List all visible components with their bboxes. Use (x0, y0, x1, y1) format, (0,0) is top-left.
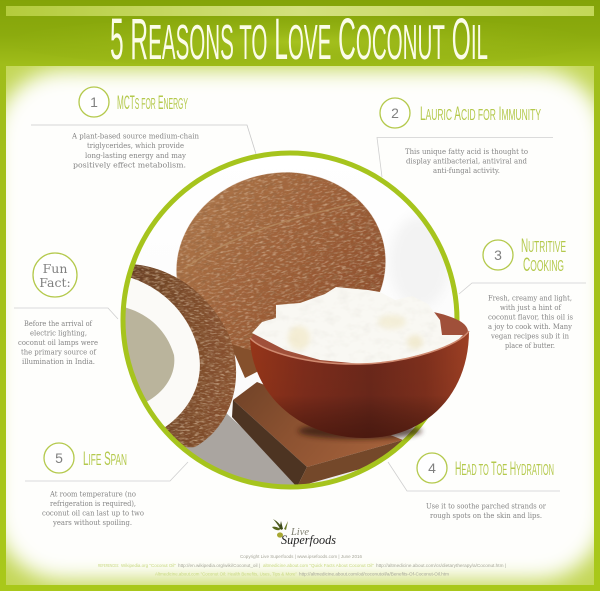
reason 5: Life Span (25, 443, 188, 527)
body text 2 (405, 147, 528, 175)
green ring (123, 153, 457, 487)
connector line 5 (25, 462, 188, 481)
reason 1: MCTs for Energy (31, 87, 256, 170)
reason 2: Lauric Acid for Immunity (377, 98, 553, 177)
title: 5 REASONS TO LOVE COCONUT OIL (110, 7, 488, 72)
fun fact (14, 253, 118, 366)
connector line 1 (31, 125, 256, 154)
reason 3: Nutritive Cooking (459, 236, 586, 350)
references: altmedicine.about.com "Quick Facts About Coconut Oil" (263, 563, 374, 568)
heading 3: COOKING (523, 255, 564, 276)
number badge 5 (44, 443, 74, 473)
yellow flake shading right (378, 315, 406, 329)
bowl shadow on board (298, 423, 422, 439)
fun fact badge: Fun (43, 261, 67, 276)
heading 4: HEAD TO TOE HYDRATION (455, 459, 554, 480)
body text fun fact: illumination in India. (22, 357, 95, 366)
body text 5: At room temperature (no (49, 490, 136, 498)
coconut half shell (131, 264, 236, 448)
body text 3: place of butter. (505, 341, 555, 350)
number badge 4: 4 (428, 460, 436, 476)
body text 3: with just a hint of (500, 303, 562, 312)
body text 4 (426, 502, 546, 520)
connector line 3 (459, 283, 586, 294)
body text 1: long-lasting energy and may (85, 151, 187, 160)
body text 4: rough spots on the skin and lips. (430, 511, 542, 520)
references: REFERENCES: (98, 563, 119, 568)
fun fact badge: Fact: (39, 275, 71, 290)
references: Wikipedia.org "Coconut Oil" (121, 563, 176, 568)
bowl rim highlight (250, 331, 469, 364)
body text 4: Use it to soothe parched strands or (426, 502, 546, 510)
coconut groove (185, 203, 358, 268)
body text 1 (71, 132, 199, 170)
wooden board top (233, 382, 403, 467)
reason 4: Head to Toe Hydration (388, 453, 560, 520)
olive branch icon (272, 519, 288, 538)
body text fun fact: Before the arrival of (24, 319, 93, 328)
table surface (186, 414, 300, 484)
number badge 5: 5 (55, 450, 63, 466)
number badge 3: 3 (494, 247, 502, 263)
number badge 2: 2 (391, 105, 399, 121)
bowl shading (250, 331, 469, 438)
logo word Superfoods: Superfoods (281, 533, 336, 547)
number badge 1 (79, 87, 109, 117)
coconut oil flakes (252, 287, 463, 364)
body text 3: a joy to cook with. Many (488, 322, 573, 331)
wooden board left face (232, 400, 307, 487)
fabric backdrop (394, 221, 445, 301)
number badge 4 (417, 453, 447, 483)
body text 2: display antibacterial, antiviral and (406, 156, 527, 166)
connector line 4 (388, 462, 560, 491)
fun fact badge (33, 253, 77, 297)
coconut cavity (126, 308, 174, 402)
whole coconut (176, 172, 386, 350)
logo: Live Superfoods (272, 519, 336, 547)
body text 3 (488, 294, 573, 350)
heading 5: LIFE SPAN (83, 449, 127, 470)
coconut white flesh (126, 278, 200, 428)
connector line fun fact (14, 308, 118, 319)
lower coconut wedge (232, 344, 258, 378)
references: http://altmedicine.about.com/od/coconutoil/a/Benefits-Of-Coconut-Oil.htm (299, 572, 449, 576)
yellow flake shading left (288, 326, 310, 350)
body text 1: triglycerides, which provide (87, 141, 184, 150)
references (98, 563, 506, 576)
connector line 2 (377, 138, 553, 177)
body text 5: refrigeration is required), (50, 499, 136, 508)
heading 2: LAURIC ACID FOR IMMUNITY (420, 104, 541, 125)
references: http://en.wikipedia.org/wiki/Coconut_oil | (178, 563, 260, 568)
body text 3: vegan recipes sub it in (490, 332, 569, 340)
body text 1: positively effect metabolism. (73, 160, 186, 170)
wooden board end face (297, 440, 403, 487)
title glow (10, 16, 590, 68)
photo: coconut and bowl of coconut oil (110, 153, 469, 495)
references: Altmedicine.about.com "Coconut Oil: Health Benefits, Uses, Tips & More" (155, 572, 297, 576)
number badge 1: 1 (90, 94, 98, 110)
body text 2: This unique fatty acid is thought to (405, 147, 528, 156)
body text fun fact: the primary source of (21, 348, 97, 356)
heading 3: NUTRITIVE (521, 236, 566, 257)
body text 3: coconut flavor, this oil is (488, 312, 573, 322)
references: http://altmedicine.about.com/cs/dietarytherapy/a/Coconut.htm | (376, 563, 506, 568)
top accent bar (6, 6, 594, 16)
body text 5: coconut oil can last up to two (42, 508, 144, 518)
logo word Live: Live (290, 526, 309, 538)
body text 1: A plant-based source medium-chain (71, 132, 199, 140)
body text 3: Fresh, creamy and light, (488, 294, 572, 302)
yellow flake shading far right (407, 335, 423, 349)
body text fun fact (18, 319, 98, 366)
body text fun fact: electric lighting, (30, 328, 87, 338)
photo backdrop (123, 153, 457, 487)
number badge 2 (380, 98, 410, 128)
body text 5: years without spoiling. (52, 518, 132, 527)
copyright: Copyright Live Superfoods | www.ipsefoods.com | June 2016 (240, 554, 363, 559)
heading 3 (521, 236, 566, 276)
body text 2: anti-fungal activity. (433, 166, 500, 175)
bowl body (250, 331, 469, 438)
body text 5 (42, 490, 144, 527)
bowl interior (251, 303, 469, 367)
clipped photo contents (110, 153, 450, 495)
heading 1: MCTS FOR ENERGY (117, 93, 188, 114)
body text fun fact: coconut oil lamps were (18, 338, 98, 347)
